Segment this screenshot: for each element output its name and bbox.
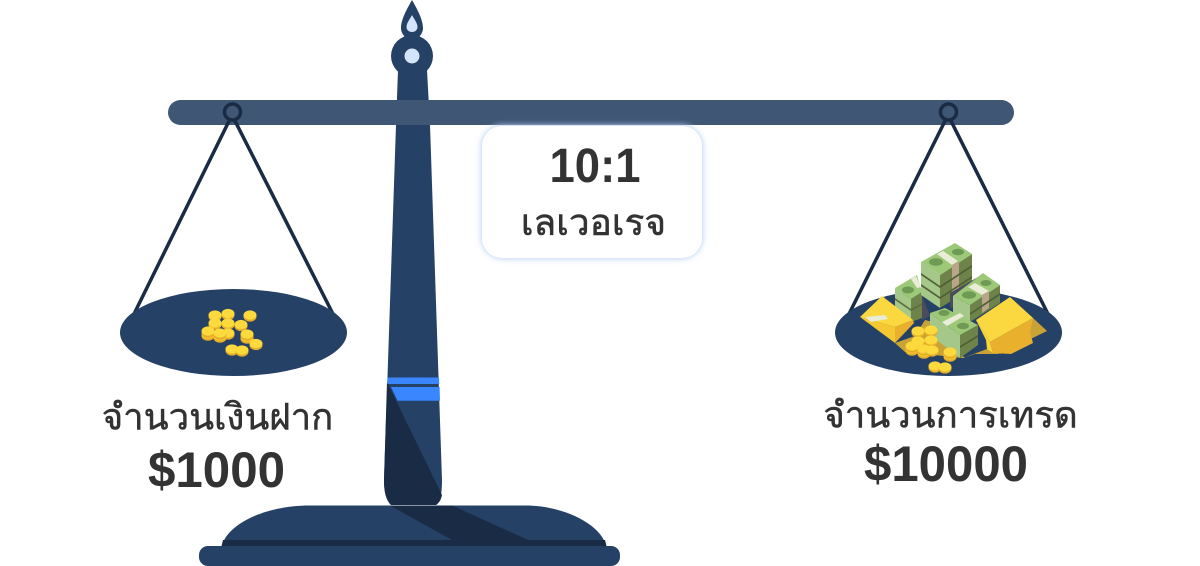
base shadow band (222, 540, 606, 546)
right strings (849, 115, 1048, 314)
trade amount: $10000 (864, 436, 1028, 492)
deposit caption: จำนวนเงินฝาก (102, 396, 333, 438)
left strings (134, 115, 333, 314)
right pan (835, 289, 1062, 376)
blue stripe lower (391, 387, 440, 401)
finial drop highlight (406, 15, 418, 32)
right label: trade size (823, 394, 1078, 492)
pile of money and gold (860, 243, 1047, 374)
big cash stack (921, 243, 972, 308)
dark gap left of front stack (922, 296, 930, 320)
small coin pile (202, 309, 262, 357)
ratio value: 10:1 (550, 140, 640, 193)
gold coins (906, 325, 956, 374)
back left cash stack (895, 275, 922, 322)
left pan assembly (120, 104, 347, 376)
column (384, 70, 442, 505)
front cash stack (930, 308, 978, 358)
column finial flame (401, 0, 423, 38)
finial ball (391, 35, 433, 77)
gold shadows (895, 318, 1047, 358)
base diagonal shadow (390, 506, 528, 540)
base dome (222, 506, 606, 546)
dark gap on big stack (950, 277, 980, 308)
finial ball highlight (404, 48, 420, 64)
right pan assembly (835, 104, 1062, 376)
card body (482, 126, 702, 258)
right cash stack (953, 273, 1000, 322)
scale stand (199, 0, 620, 566)
deposit amount: $1000 (148, 442, 285, 498)
left pan (120, 289, 347, 376)
right pivot ring (940, 104, 956, 120)
blue stripe upper (387, 378, 439, 384)
left pivot ring (224, 104, 240, 120)
column shadow (384, 382, 442, 505)
beam (168, 100, 1014, 125)
left label: deposit (102, 396, 333, 498)
base foot (199, 546, 620, 566)
card glow (481, 125, 703, 259)
left gold bar (860, 296, 914, 343)
ratio card (481, 125, 703, 259)
ratio label: เลเวอเรจ (521, 202, 666, 243)
right gold bar (976, 297, 1033, 354)
trade caption: จำนวนการเทรด (823, 394, 1078, 436)
